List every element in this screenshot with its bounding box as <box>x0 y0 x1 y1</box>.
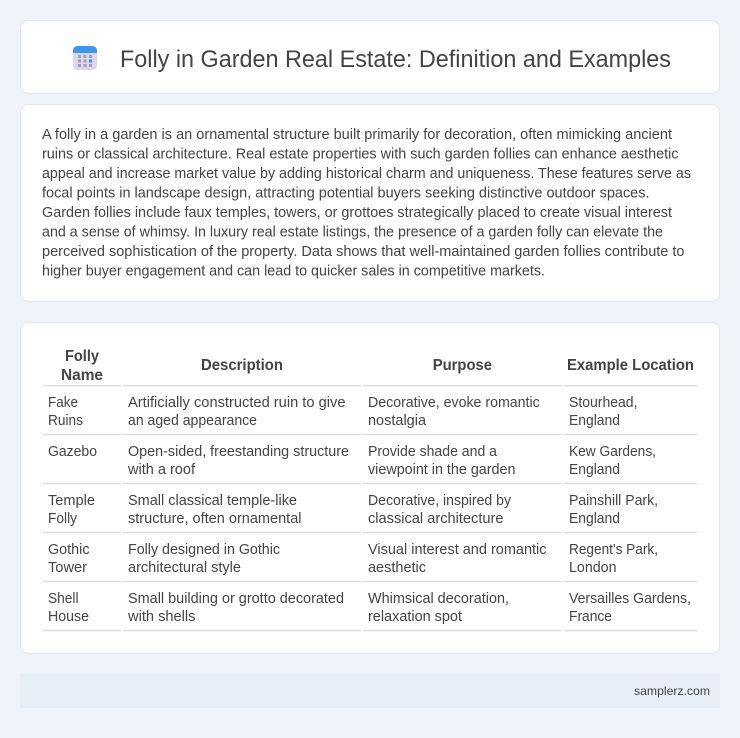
table row: Gothic Tower: Tower <box>48 560 87 576</box>
table row: Gothic Tower: Visual interest and romantic <box>368 542 546 558</box>
table row: Shell House: with shells <box>127 609 196 625</box>
table row: Fake Ruins: England <box>569 413 620 429</box>
table header row: Purpose <box>433 357 492 374</box>
table row: Fake Ruins: Ruins <box>48 413 83 429</box>
text block: introduction paragraph: perceived sophistication of the property. Data shows that well-maintained garden follies contribute to <box>42 244 684 260</box>
table row: Gothic Tower: London <box>569 560 616 576</box>
table row: Temple Folly <box>48 493 658 527</box>
table row: Fake Ruins: Stourhead, <box>569 395 638 411</box>
text block: introduction paragraph: and a sense of whimsy. In luxury real estate listings, the presence of a garden folly can elevate the <box>42 224 663 240</box>
table header row: Example Location <box>567 357 694 374</box>
table row: Gothic Tower: aesthetic <box>368 560 426 576</box>
table row: Gothic Tower <box>48 542 658 576</box>
text block: introduction paragraph: focal points in landscape design, attracting potential buyers seeking distinctive outdoor spaces. <box>42 186 650 202</box>
table row: Gothic Tower: Gothic <box>48 542 90 558</box>
table row: Temple Folly: Folly <box>48 511 78 527</box>
table row: Temple Folly: structure, often ornamental <box>128 511 302 527</box>
table row: Gothic Tower: architectural style <box>128 560 241 576</box>
table row: Shell House: Versailles Gardens, <box>569 591 691 607</box>
table header row: Name <box>61 367 103 384</box>
table row: Temple Folly: Temple <box>48 493 95 509</box>
text block: introduction paragraph <box>42 127 691 280</box>
table row: Temple Folly: Decorative, inspired by <box>368 493 512 509</box>
table row: Shell House: Whimsical decoration, <box>368 591 509 607</box>
table row: Shell House: relaxation spot <box>368 609 462 625</box>
table row: Fake Ruins: Fake <box>48 395 78 411</box>
panel: folly table <box>20 322 720 654</box>
table row: Shell House <box>48 591 691 625</box>
table row: Temple Folly: Small classical temple-like <box>128 493 297 509</box>
table row: Shell House: Small building or grotto decorated <box>128 591 344 607</box>
text block: introduction paragraph: ruins or classical architecture. Real estate properties with such garden follies can enhance aesthetic <box>42 146 678 162</box>
table header row <box>61 348 694 384</box>
table row: Gazebo: Provide shade and a <box>368 444 497 460</box>
footer <box>20 674 720 708</box>
table row: Gazebo: with a roof <box>127 462 196 478</box>
table row: Temple Folly: Painshill Park, <box>569 493 658 509</box>
panel: introduction <box>20 104 720 302</box>
table row: Shell House: Shell <box>48 591 78 607</box>
table row: Gazebo: Open-sided, freestanding structure <box>128 444 349 460</box>
title: Folly in Garden Real Estate: Definition and Examples <box>120 46 671 73</box>
table row: Fake Ruins: nostalgia <box>368 413 426 429</box>
table row: Gazebo: England <box>569 462 620 478</box>
table row: Fake Ruins: an aged appearance <box>128 413 257 429</box>
table row: Fake Ruins <box>48 395 638 429</box>
table header row: Folly <box>65 348 99 365</box>
table header row: Description <box>201 357 283 374</box>
icon: calendar <box>73 46 97 70</box>
table row: Gothic Tower: Folly designed in Gothic <box>128 542 280 558</box>
text block: introduction paragraph: Garden follies include faux temples, towers, or grottoes strategically placed to create visual interest <box>42 205 672 221</box>
table row: Gazebo <box>48 444 656 478</box>
table row: Gazebo: Gazebo <box>48 444 97 460</box>
table row: Shell House: House <box>48 609 89 625</box>
table row: Shell House: France <box>569 609 612 625</box>
footer source text: samplerz.com <box>634 684 710 698</box>
text block: introduction paragraph: higher buyer engagement and can lead to quicker sales in competitive markets. <box>42 264 545 280</box>
table row: Fake Ruins: Decorative, evoke romantic <box>368 395 540 411</box>
panel: header <box>20 20 720 94</box>
table row: Temple Folly: classical architecture <box>368 511 504 527</box>
table row: Gazebo: Kew Gardens, <box>569 444 656 460</box>
table row: Temple Folly: England <box>569 511 620 527</box>
table row: Fake Ruins: Artificially constructed ruin to give <box>128 395 346 411</box>
text block: introduction paragraph: A folly in a garden is an ornamental structure built primarily for decoration, often mimicking ancient <box>42 127 672 143</box>
table row: Gothic Tower: Regent's Park, <box>569 542 658 558</box>
text block: introduction paragraph: appeal and increase market value by adding historical charm and uniqueness. These features serve as <box>42 166 691 182</box>
table row: Gazebo: viewpoint in the garden <box>368 462 516 478</box>
